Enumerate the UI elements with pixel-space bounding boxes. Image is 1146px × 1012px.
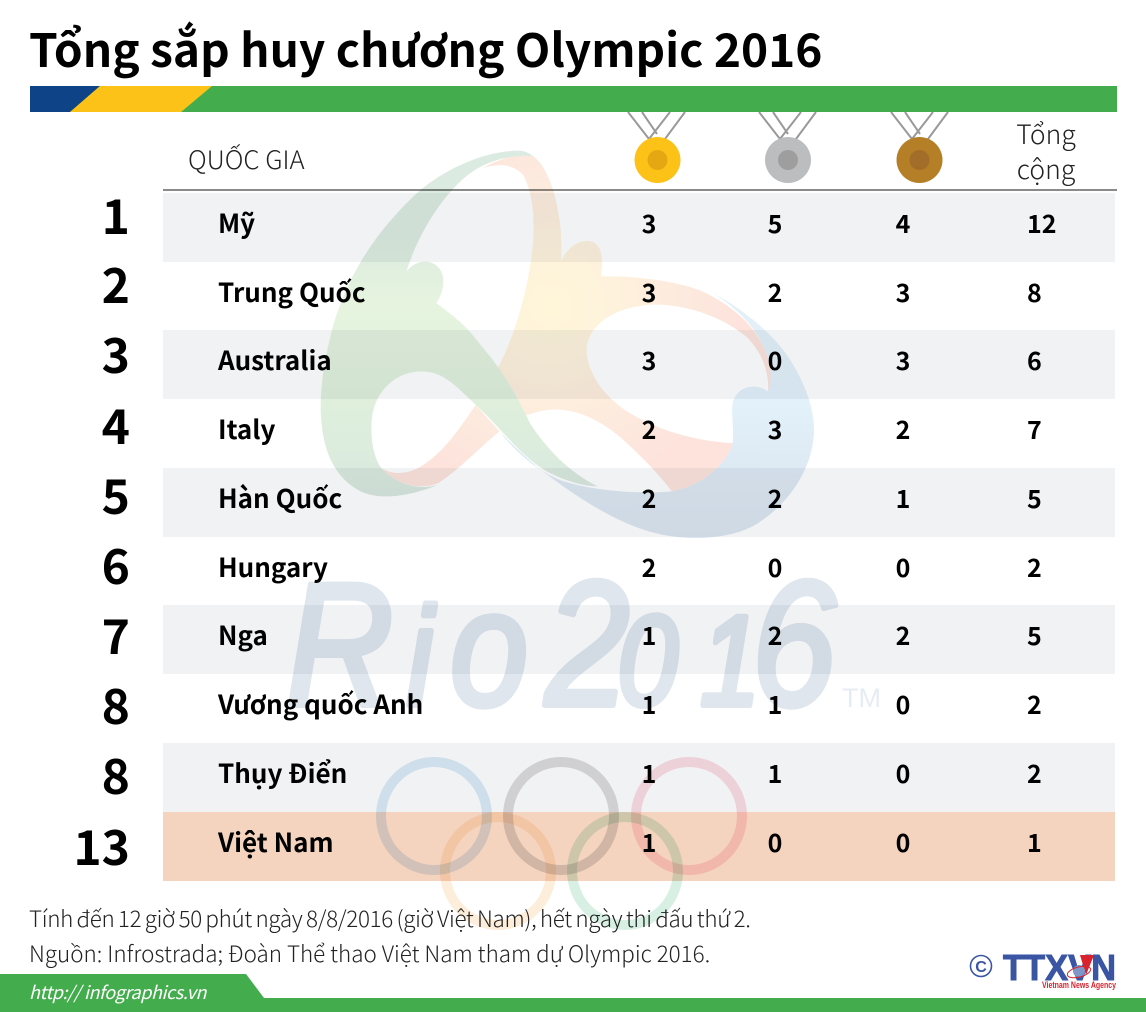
column header: total: Tổng [1016, 113, 1076, 152]
footer url: http:// infographics.vn [29, 979, 206, 1005]
row: Nga: 2 [896, 617, 910, 653]
row: Việt Nam (highlighted): 0 [896, 824, 910, 860]
row: Vương quốc Anh: 1 [768, 686, 782, 722]
row: Hungary: 0 [768, 549, 782, 585]
row: Hungary [218, 548, 1042, 585]
column header: total [1016, 113, 1076, 187]
emblem: three dancing figures [321, 151, 814, 538]
row: Thụy Điển [163, 743, 1115, 812]
trademark mark: TM [842, 683, 881, 713]
row: Italy [218, 410, 1042, 447]
row: Hàn Quốc: Hàn Quốc [218, 479, 342, 516]
row: Thụy Điển: 1 [768, 755, 782, 791]
row: Trung Quốc: Trung Quốc [218, 273, 366, 310]
row: Mỹ [163, 193, 1115, 262]
row: Australia: 6 [1027, 342, 1042, 378]
row: Việt Nam (highlighted) [163, 812, 1115, 881]
row: Mỹ: 5 [768, 205, 782, 241]
row: Thụy Điển: 2 [1027, 755, 1042, 791]
footer bar [0, 974, 1146, 1012]
rank 1: 1 [102, 178, 130, 248]
row: Hungary: Hungary [218, 548, 328, 585]
row: Việt Nam (highlighted): 1 [1027, 824, 1042, 860]
agency wordmark: TTXVN [1003, 948, 1116, 988]
row: Trung Quốc: 8 [1027, 274, 1042, 310]
row: Vương quốc Anh: Vương quốc Anh [218, 685, 423, 722]
row: Hàn Quốc: 2 [642, 480, 656, 516]
medal table [73, 178, 1115, 881]
row: Hàn Quốc [163, 468, 1115, 537]
copyright symbol [970, 956, 992, 976]
emblem wordmark: Rio2016: o [450, 556, 528, 741]
row: Vương quốc Anh: 1 [642, 686, 656, 722]
row: Thụy Điển: 1 [642, 755, 656, 791]
rank 8: 8 [102, 668, 130, 738]
row: Vương quốc Anh: 2 [1027, 686, 1042, 722]
row: Australia: 0 [768, 342, 782, 378]
row: Trung Quốc [218, 273, 1042, 310]
footnote: source: Nguồn: Infrostrada; Đoàn Thể thao Việt Nam tham dự Olympic 2016. [29, 937, 710, 969]
row: Hungary: 2 [642, 549, 656, 585]
emblem wordmark: Rio2016: i [407, 578, 436, 735]
rank 5: 5 [102, 458, 130, 528]
rank 13: 13 [73, 809, 130, 879]
row: Italy: 2 [896, 411, 910, 447]
row: Italy: 2 [642, 411, 656, 447]
copyright symbol: C [975, 959, 987, 976]
row: Australia: 3 [896, 342, 910, 378]
row: Nga: Nga [218, 616, 268, 653]
row: Australia [163, 330, 1115, 399]
row: Hàn Quốc: 5 [1027, 480, 1042, 516]
row: Trung Quốc: 3 [896, 274, 910, 310]
row: Nga: 2 [768, 617, 782, 653]
column header: medal icons [627, 112, 949, 183]
emblem wordmark: Rio2016: 6 [752, 544, 836, 744]
emblem wordmark: Rio2016: 1 [700, 590, 760, 733]
emblem wordmark: Rio2016: R [286, 548, 393, 743]
title: Tổng sắp huy chương Olympic 2016 [29, 15, 822, 81]
globe swoosh [1066, 955, 1094, 980]
icon: gold medal [628, 112, 685, 183]
row: Việt Nam (highlighted): 0 [768, 824, 782, 860]
row: Việt Nam (highlighted): Việt Nam [218, 823, 334, 860]
row: Hungary: 0 [896, 549, 910, 585]
rank 8 (tie): 8 [102, 738, 130, 808]
row: Hàn Quốc: 2 [768, 480, 782, 516]
row: Hàn Quốc: 1 [896, 480, 910, 516]
rank 3: 3 [102, 317, 130, 387]
row: Italy: Italy [218, 410, 275, 447]
column header: country: QUỐC GIA [188, 140, 305, 177]
rank 2: 2 [102, 247, 130, 317]
row: Trung Quốc: 3 [642, 274, 656, 310]
row: Thụy Điển: Thụy Điển [218, 754, 347, 791]
olympic rings [381, 762, 742, 925]
icon: silver medal [759, 112, 816, 183]
row: Mỹ: Mỹ [218, 204, 255, 241]
rank 4: 4 [102, 388, 130, 458]
row: Trung Quốc: 2 [768, 274, 782, 310]
emblem wordmark: Rio2016: 0 [618, 590, 678, 733]
row: Nga [163, 605, 1115, 674]
row: Vương quốc Anh: 0 [896, 686, 910, 722]
footnote: time of data: Tính đến 12 giờ 50 phút ngày 8/8/2016 (giờ Việt Nam), hết ngày thi đấu thứ 2. [29, 902, 751, 934]
row: Mỹ: 4 [896, 205, 910, 241]
row: Italy: 7 [1027, 411, 1042, 447]
icon: bronze medal [891, 112, 948, 183]
row: Thụy Điển: 0 [896, 755, 910, 791]
row: Vương quốc Anh [218, 685, 1042, 722]
emblem wordmark: Rio2016: 2 [544, 544, 629, 744]
header rule [163, 189, 1117, 191]
row: Nga: 1 [642, 617, 656, 653]
logo: TTXVN [970, 948, 1116, 990]
row: Nga: 5 [1027, 617, 1042, 653]
rank 7: 7 [102, 598, 130, 668]
rank 6: 6 [102, 528, 130, 598]
row: Mỹ: 12 [1027, 205, 1057, 241]
row: Mỹ: 3 [642, 205, 656, 241]
row: Việt Nam (highlighted): 1 [642, 824, 656, 860]
column header: total: cộng [1017, 148, 1075, 187]
row: Hungary: 2 [1027, 549, 1042, 585]
row: Australia: 3 [642, 342, 656, 378]
row: Australia: Australia [218, 341, 332, 378]
row: Italy: 3 [768, 411, 782, 447]
header colour bar [30, 86, 1117, 112]
